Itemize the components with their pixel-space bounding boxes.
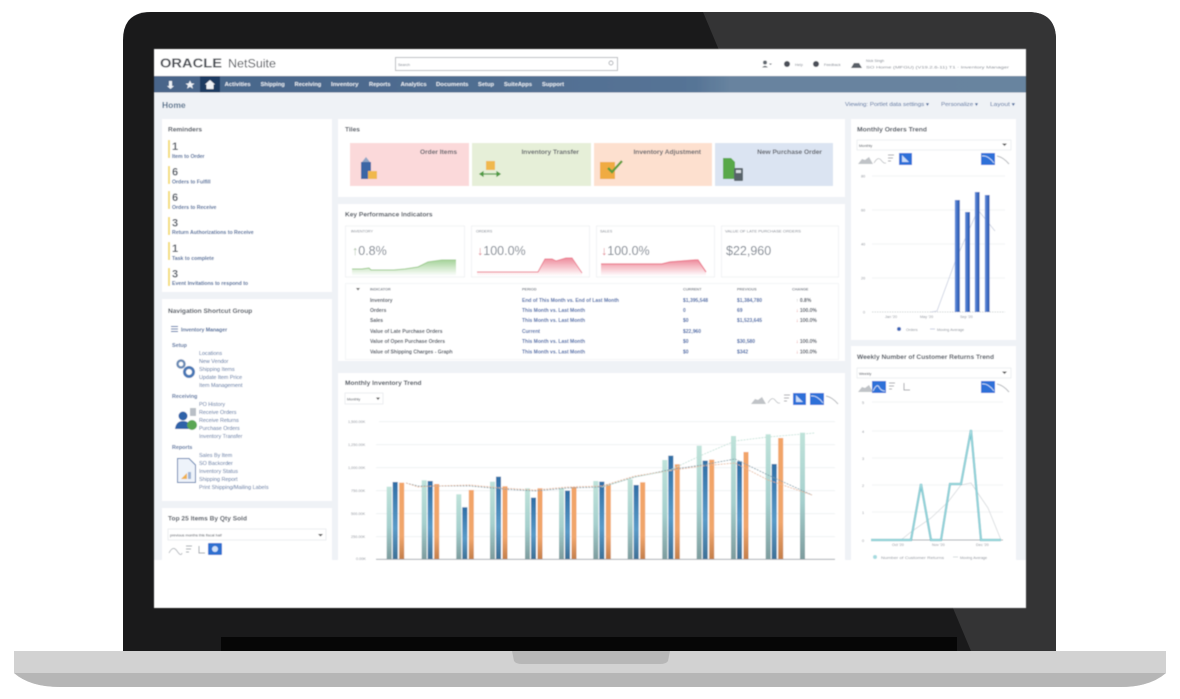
icon: gears bbox=[178, 360, 194, 376]
panel: reminders: Orders to Fulfill bbox=[172, 179, 211, 185]
kpi card: sales bbox=[596, 226, 714, 277]
kpi table bbox=[346, 284, 838, 360]
panel: key performance indicators bbox=[338, 204, 845, 361]
bar chart: monthly orders: May '20 bbox=[920, 315, 933, 319]
bar chart: monthly orders: 80 bbox=[861, 174, 865, 178]
user tools: Help bbox=[795, 63, 803, 67]
kpi card: value of late purchase orders bbox=[722, 226, 838, 277]
laptop bezel bbox=[123, 12, 1056, 651]
panel: navigation shortcut group: Navigation Shortcut Group bbox=[168, 308, 252, 315]
kpi card: sales: ↓100.0% bbox=[601, 244, 650, 258]
kpi card: value of late purchase orders: VALUE OF LATE PURCHASE ORDERS bbox=[725, 230, 802, 234]
period dropdown: Weekly bbox=[859, 372, 871, 376]
panel: navigation shortcut group: SO Backorder bbox=[199, 461, 233, 467]
table row: inventory: End of This Month vs. End of Last Month bbox=[522, 298, 619, 304]
icon: report document bbox=[178, 458, 196, 482]
panel: monthly inventory trend: Monthly Inventory Trend bbox=[345, 380, 422, 387]
table row: orders: Orders bbox=[370, 308, 387, 314]
period dropdown: Monthly bbox=[347, 398, 360, 402]
bar chart: monthly orders: Sep '20 bbox=[960, 315, 973, 319]
line chart: weekly returns: 1 bbox=[862, 511, 864, 515]
logo bbox=[160, 56, 276, 70]
panel: navigation shortcut group: Update Item Price bbox=[199, 375, 242, 381]
navigation bar: Documents bbox=[436, 82, 468, 88]
panel: reminders: Task to complete bbox=[172, 256, 214, 262]
legend: Number of Customer Returns bbox=[881, 556, 944, 560]
legend: Moving Average bbox=[937, 328, 964, 332]
legend bbox=[873, 555, 987, 560]
table row: sales: $0 bbox=[683, 318, 689, 324]
table row: inventory: ↑ 0.8% bbox=[796, 298, 812, 304]
period dropdown: previous months this fiscal half bbox=[170, 534, 223, 538]
tile: new purchase order bbox=[715, 143, 833, 186]
panel: navigation shortcut group: Shipping Report bbox=[199, 477, 238, 483]
panel: navigation shortcut group: Receive Returns bbox=[199, 418, 239, 424]
panel: monthly inventory trend bbox=[338, 373, 845, 561]
panel: navigation shortcut group: Inventory Status bbox=[199, 469, 238, 475]
table row: inventory bbox=[370, 298, 812, 304]
y axis labels: 750.00K bbox=[351, 489, 366, 493]
bar chart: monthly orders bbox=[861, 174, 1005, 332]
y axis labels: 1,500.00K bbox=[348, 420, 366, 424]
header bar bbox=[160, 56, 1010, 70]
user tools: SO Home (MFGU) (V19.2.6-11) T1 · Inventory Manager bbox=[866, 66, 1010, 70]
line chart: weekly returns: 0 bbox=[862, 539, 864, 543]
page title: Home bbox=[162, 100, 186, 110]
user tools: Feedback bbox=[824, 63, 841, 67]
panel: navigation shortcut group: Reports bbox=[172, 445, 192, 451]
search box bbox=[396, 58, 618, 70]
table row: late purchase orders: Value of Late Purchase Orders bbox=[370, 329, 443, 335]
table row: shipping charges: $342 bbox=[737, 350, 748, 356]
kpi card: orders bbox=[472, 226, 590, 277]
user tools bbox=[762, 59, 1010, 70]
kpi card: inventory: INVENTORY bbox=[351, 230, 373, 234]
page options bbox=[845, 102, 1015, 108]
panel: reminders: 6 bbox=[172, 192, 178, 204]
panel: reminders: Reminders bbox=[168, 126, 202, 134]
panel: navigation shortcut group: Locations bbox=[199, 351, 222, 357]
table row: sales bbox=[370, 318, 817, 324]
table row: shipping charges: $0 bbox=[683, 350, 689, 356]
tile: inventory transfer: Inventory Transfer bbox=[521, 149, 579, 156]
logo: ORACLE bbox=[160, 56, 222, 70]
panel: monthly orders trend bbox=[851, 119, 1016, 340]
inventory manager link: Inventory Manager bbox=[181, 328, 227, 334]
tile: inventory adjustment: Inventory Adjustment bbox=[633, 149, 702, 156]
table row: open purchase orders: $0 bbox=[683, 339, 689, 345]
table row: orders: This Month vs. Last Month bbox=[522, 308, 585, 314]
panel: tiles bbox=[338, 119, 845, 197]
line chart: weekly returns: Dec '20 bbox=[976, 543, 989, 547]
panel: navigation shortcut group: Receiving bbox=[172, 394, 197, 400]
table row: open purchase orders bbox=[370, 339, 817, 345]
kpi table: INDICATOR bbox=[370, 288, 391, 292]
period dropdown bbox=[857, 368, 1011, 378]
kpi card: sales: SALES bbox=[600, 230, 613, 234]
legend: Orders bbox=[906, 328, 918, 332]
table row: shipping charges: Value of Shipping Charges - Graph bbox=[370, 350, 453, 356]
table row: shipping charges bbox=[370, 350, 817, 356]
panel: reminders: 3 bbox=[172, 218, 178, 230]
table row: orders bbox=[370, 308, 817, 314]
tile: new purchase order: New Purchase Order bbox=[757, 149, 822, 156]
kpi card: orders: ORDERS bbox=[476, 230, 493, 234]
bar chart: monthly orders: 20 bbox=[861, 276, 865, 280]
panel: reminders: Orders to Receive bbox=[172, 205, 217, 211]
table row: inventory: Inventory bbox=[370, 298, 393, 304]
tile: order items bbox=[350, 143, 469, 186]
navigation bar: Reports bbox=[369, 82, 390, 88]
period dropdown: Monthly bbox=[859, 144, 872, 148]
table row: open purchase orders: $30,580 bbox=[737, 339, 755, 345]
line chart: weekly returns bbox=[862, 401, 1003, 560]
page options: Viewing: Portlet data settings ▾ bbox=[845, 102, 929, 108]
navigation bar: SuiteApps bbox=[504, 82, 532, 88]
panel: reminders: Return Authorizations to Receive bbox=[172, 230, 254, 236]
table row: late purchase orders: $22,960 bbox=[683, 329, 701, 335]
bar chart: monthly orders: 60 bbox=[861, 208, 865, 212]
screen bbox=[154, 49, 1026, 608]
page options: Layout ▾ bbox=[990, 102, 1015, 108]
panel: reminders: 3 bbox=[172, 268, 178, 280]
kpi card: orders: ↓100.0% bbox=[477, 244, 526, 258]
kpi table: CURRENT bbox=[683, 288, 702, 292]
chart type icons bbox=[169, 543, 222, 555]
panel: reminders: 6 bbox=[172, 166, 178, 178]
panel: reminders: 1 bbox=[172, 243, 178, 255]
panel: key performance indicators: Key Performance Indicators bbox=[345, 212, 433, 218]
user tools: Nick Singh bbox=[866, 59, 884, 63]
tile: inventory adjustment bbox=[594, 143, 712, 186]
panel: top 25 items bbox=[162, 508, 332, 560]
search box: Search bbox=[398, 63, 410, 67]
table row: shipping charges: This Month vs. Last Month bbox=[522, 350, 585, 356]
panel: reminders: Event Invitations to respond to bbox=[172, 281, 248, 287]
table row: late purchase orders bbox=[370, 329, 701, 335]
nav icons bbox=[167, 80, 215, 89]
bar chart: monthly orders: 40 bbox=[861, 242, 865, 246]
y axis labels: 500.00K bbox=[351, 512, 366, 516]
kpi table: PERIOD bbox=[522, 288, 537, 292]
navigation bar: Analytics bbox=[401, 82, 427, 88]
chart type icons bbox=[858, 153, 1009, 165]
white lower screen area bbox=[154, 560, 1026, 608]
panel: navigation shortcut group bbox=[162, 299, 332, 501]
navigation bar: Shipping bbox=[261, 82, 285, 88]
panel: navigation shortcut group: Shipping Items bbox=[199, 367, 235, 373]
kpi card: inventory bbox=[346, 226, 464, 277]
table row: inventory: $1,384,780 bbox=[737, 298, 762, 304]
panel: navigation shortcut group: Inventory Transfer bbox=[199, 434, 243, 440]
table row: sales: This Month vs. Last Month bbox=[522, 318, 585, 324]
line chart: weekly returns: 2 bbox=[862, 484, 864, 488]
table row: sales: ↓ 100.0% bbox=[796, 318, 817, 324]
line chart: weekly returns: 5 bbox=[862, 401, 864, 405]
table row: orders: ↓ 100.0% bbox=[796, 308, 817, 314]
laptop base bbox=[14, 651, 1166, 687]
tile: order items: Order Items bbox=[420, 149, 457, 156]
y axis labels: 1,000.00K bbox=[348, 466, 366, 470]
bar chart: monthly inventory bbox=[348, 420, 835, 561]
y axis labels bbox=[348, 420, 366, 561]
table row: orders: 0 bbox=[683, 308, 686, 314]
table row: late purchase orders: Current bbox=[522, 329, 540, 335]
table row: sales: $1,523,645 bbox=[737, 318, 762, 324]
panel: weekly customer returns trend bbox=[851, 346, 1016, 560]
panel: monthly orders trend: Monthly Orders Trend bbox=[857, 126, 927, 134]
panel: navigation shortcut group: Receive Orders bbox=[199, 410, 237, 416]
bar chart: monthly orders: Jan '20 bbox=[885, 315, 897, 319]
panel: reminders: Item to Order bbox=[172, 154, 205, 160]
navigation bar: Activities bbox=[225, 82, 251, 88]
panel: navigation shortcut group: Purchase Orders bbox=[199, 426, 240, 432]
period dropdown bbox=[168, 529, 326, 540]
line chart: weekly returns: Nov '20 bbox=[932, 543, 945, 547]
legend bbox=[897, 327, 964, 332]
navigation bar: Support bbox=[542, 82, 564, 88]
line chart: weekly returns: 3 bbox=[862, 457, 864, 461]
panel: reminders: 1 bbox=[172, 141, 178, 153]
panel: top 25 items: Top 25 Items By Qty Sold bbox=[168, 516, 247, 522]
y axis labels: 250.00K bbox=[351, 535, 366, 539]
line chart: weekly returns: Oct '20 bbox=[892, 543, 904, 547]
panel: reminders bbox=[162, 119, 332, 292]
legend: Moving Average bbox=[960, 556, 987, 560]
panel: navigation shortcut group: Item Management bbox=[199, 383, 243, 389]
icon: people bbox=[175, 408, 197, 430]
tile: inventory transfer bbox=[472, 143, 591, 186]
y axis labels: 0.00K bbox=[356, 557, 366, 561]
table row: open purchase orders: Value of Open Purchase Orders bbox=[370, 339, 445, 345]
table row: sales: Sales bbox=[370, 318, 383, 324]
navigation bar bbox=[154, 76, 1026, 92]
y axis labels: 1,250.00K bbox=[348, 443, 366, 447]
navigation bar: Inventory bbox=[331, 82, 358, 88]
panel: navigation shortcut group: Print Shipping/Mailing Labels bbox=[199, 485, 269, 491]
bar chart: monthly orders: 0 bbox=[863, 310, 865, 314]
period dropdown bbox=[345, 393, 383, 404]
period dropdown bbox=[857, 140, 1011, 150]
chart type icons bbox=[858, 381, 1009, 393]
table row: open purchase orders: ↓ 100.0% bbox=[796, 339, 817, 345]
panel: navigation shortcut group: Sales By Item bbox=[199, 453, 233, 459]
table row: orders: 69 bbox=[737, 308, 743, 314]
logo: NetSuite bbox=[228, 56, 276, 70]
panel: navigation shortcut group: New Vendor bbox=[199, 359, 229, 365]
page options: Personalize ▾ bbox=[941, 102, 978, 108]
navigation bar: Setup bbox=[478, 82, 495, 88]
table row: open purchase orders: This Month vs. Last Month bbox=[522, 339, 585, 345]
table row: shipping charges: ↓ 100.0% bbox=[796, 350, 817, 356]
kpi card: value of late purchase orders: $22,960 bbox=[726, 244, 771, 258]
panel: tiles: Tiles bbox=[345, 126, 360, 134]
panel: weekly customer returns trend: Weekly Number of Customer Returns Trend bbox=[857, 354, 994, 361]
table row: inventory: $1,395,548 bbox=[683, 298, 708, 304]
navigation bar: Receiving bbox=[295, 82, 321, 88]
panel: navigation shortcut group: PO History bbox=[199, 402, 225, 408]
panel: navigation shortcut group: Setup bbox=[172, 343, 188, 349]
chart type icons bbox=[751, 393, 838, 405]
kpi table: PREVIOUS bbox=[737, 288, 757, 292]
kpi card: inventory: ↑0.8% bbox=[352, 244, 387, 258]
kpi table: CHANGE bbox=[792, 288, 809, 292]
line chart: weekly returns: 4 bbox=[862, 430, 864, 434]
